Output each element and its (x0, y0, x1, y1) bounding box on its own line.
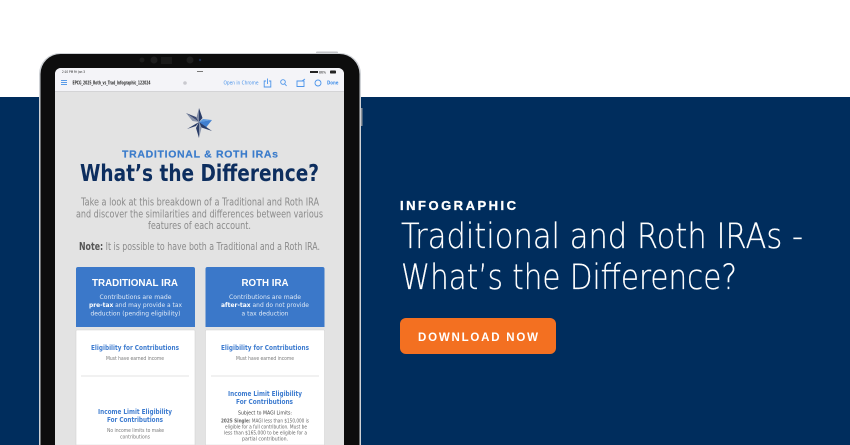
panel: roth IRA details: partial contribution. (242, 436, 288, 442)
app toolbar (55, 68, 344, 92)
eyebrow label: INFOGRAPHIC (400, 198, 517, 213)
document heading (80, 148, 319, 187)
panel: roth IRA details: less than $165,000 to be eligible for a (224, 430, 307, 436)
tablet mockup (39, 52, 362, 445)
panel: traditional IRA details: Eligibility for Contributions (91, 344, 179, 352)
panel: roth IRA details: For Contributions (236, 398, 293, 406)
panel: roth IRA details: eligible for a full contribution. Must be (225, 424, 307, 430)
panel: traditional IRA header: pre-tax and may provide a tax (89, 302, 182, 309)
menu icon (61, 80, 67, 85)
main title: What’s the Difference? (401, 258, 737, 298)
intro text (76, 196, 323, 232)
panel: roth IRA details (206, 330, 324, 445)
panel: traditional IRA details (76, 330, 195, 445)
panel: traditional IRA details: Income Limit Eligibility (98, 408, 172, 416)
download button (400, 318, 556, 354)
panel: roth IRA header: a tax deduction (242, 310, 289, 318)
panel: roth IRA details: Must have earned income (236, 356, 294, 362)
intro text: Take a look at this breakdown of a Traditional and Roth IRA (80, 196, 320, 208)
panel: traditional IRA details: Must have earned income (106, 356, 164, 362)
panel: roth IRA header (206, 267, 324, 327)
panel: roth IRA header: Contributions are made (229, 294, 301, 301)
panel: traditional IRA header (76, 267, 195, 327)
panel: roth IRA header: after-tax and do not provide (221, 302, 309, 309)
main title (401, 217, 803, 298)
camera (140, 56, 201, 64)
file name: EPCG_2025_Roth_vs_Trad_Infographic_122024 (72, 80, 151, 86)
document heading: TRADITIONAL & ROTH IRAs (122, 148, 278, 160)
panel: traditional IRA details: contributions (120, 434, 150, 440)
toolbar actions: Open in Chrome (224, 80, 258, 86)
panel: traditional IRA header: deduction (pending eligibility) (90, 310, 180, 318)
navy background panel (0, 97, 850, 445)
panel: roth IRA details: 2025 Single: MAGI less than $150,000 is (221, 418, 309, 424)
panel: traditional IRA details: No income limits to make (107, 428, 164, 434)
app toolbar: 86% (319, 70, 327, 74)
panel: traditional IRA details: For Contributions (107, 416, 163, 424)
panel: roth IRA details: Eligibility for Contributions (221, 344, 309, 352)
tablet screen (55, 68, 344, 445)
panel: roth IRA header: ROTH IRA (242, 278, 288, 289)
download button: DOWNLOAD NOW (418, 332, 538, 344)
main title: Traditional and Roth IRAs - (401, 217, 803, 257)
intro text: and discover the similarities and differences between various (76, 208, 323, 220)
intro text: features of each account. (148, 220, 251, 232)
icon: compass star logo (186, 108, 212, 138)
panel: roth IRA details: Income Limit Eligibility (228, 390, 302, 398)
panel: roth IRA details: Subject to MAGI Limits: (238, 410, 292, 416)
panel: traditional IRA header: TRADITIONAL IRA (92, 278, 178, 289)
toolbar actions (224, 78, 339, 87)
app toolbar: 2:10 PM Fri Jan 3 (62, 70, 85, 74)
document heading: What’s the Difference? (80, 159, 319, 187)
note text: Note: It is possible to have both a Traditional and a Roth IRA. (79, 241, 320, 253)
toolbar actions: Done (327, 80, 339, 86)
panel: traditional IRA header: Contributions are made (100, 294, 172, 301)
